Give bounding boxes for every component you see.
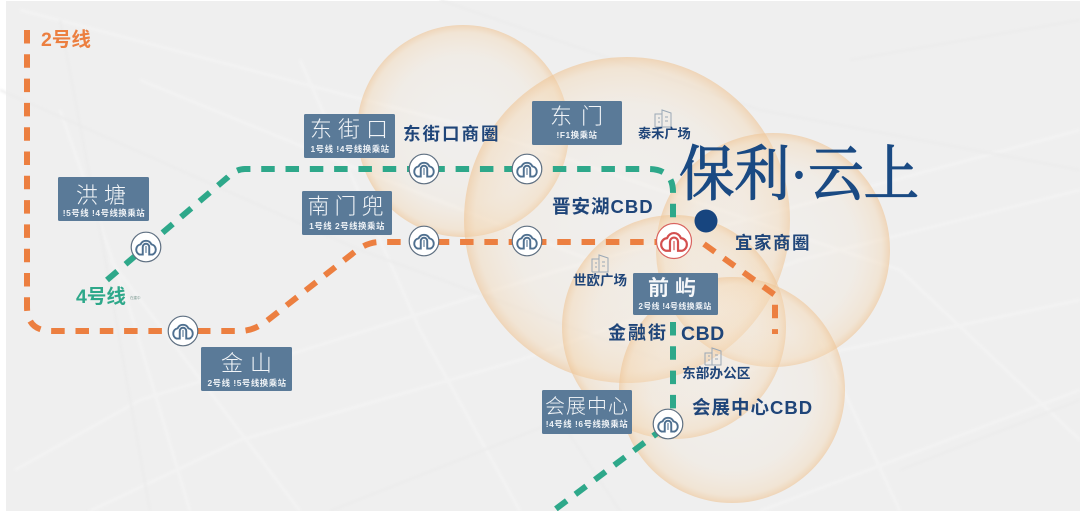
landmark: 东部办公区	[682, 348, 751, 381]
area label: CBD: CBD	[681, 323, 725, 345]
label box: 东门: !F1换乘站	[556, 130, 598, 140]
landmark: 泰禾广场: 泰禾广场	[638, 125, 691, 141]
landmark: 世欧广场	[573, 255, 627, 288]
catchment circles	[357, 25, 890, 503]
label box: 会展中心	[542, 390, 632, 434]
line label: 4号线: 在建中	[130, 295, 141, 300]
metro line 4 (green)	[107, 169, 673, 511]
station: 东门	[512, 154, 542, 184]
label box: 洪塘: !5号线 !4号线换乘站	[63, 208, 145, 218]
project marker	[694, 210, 718, 232]
label box: 前屿	[633, 273, 718, 315]
label box: 东门: 东门	[550, 104, 612, 129]
label box: 南门兜: 南门兜	[307, 194, 389, 219]
station: 会展中心	[653, 409, 683, 439]
label box: 金山: 2号线 !5号线换乘站	[207, 378, 287, 388]
area label: 晋安湖CBD: 晋安湖CBD	[552, 196, 654, 217]
label box: 南门兜: 1号线 2号线换乘站	[309, 221, 385, 231]
label box: 东门	[532, 101, 622, 145]
landmark: 泰禾广场	[638, 110, 691, 141]
line label: 4号线: 4号线	[76, 286, 126, 308]
label box: 东街口: 东街口	[310, 117, 394, 142]
station: 东街口	[409, 154, 439, 184]
line label: 2号线: 2号线	[41, 29, 91, 51]
label box: 洪塘: 洪塘	[76, 183, 132, 208]
label box: 东街口: 1号线 !4号线换乘站	[310, 144, 390, 154]
station: 前屿 (red)	[656, 224, 692, 258]
metro line 2 (orange)	[27, 30, 775, 334]
area label: 宜家商圈: 宜家商圈	[735, 233, 811, 253]
station: 晋安湖	[512, 226, 542, 256]
station: 金山	[168, 316, 198, 346]
label box: 洪塘	[58, 177, 149, 221]
project title: 保利·云上: 保利·云上	[679, 142, 919, 208]
area label: 东街口商圈: 东街口商圈	[403, 124, 500, 144]
station: 洪塘	[131, 232, 161, 262]
label box: 前屿: 前屿	[648, 277, 702, 300]
label box: 金山: 金山	[221, 351, 279, 376]
landmark: 东部办公区: 东部办公区	[682, 365, 751, 381]
station: 南门兜	[409, 226, 439, 256]
landmark: 世欧广场: 世欧广场	[573, 272, 627, 288]
label box: 南门兜	[302, 191, 392, 235]
label box: 金山	[201, 347, 292, 391]
label box: 会展中心: !4号线 !6号线换乘站	[546, 419, 628, 429]
label box: 前屿: 2号线 !4号线换乘站	[638, 301, 712, 311]
label box: 东街口	[304, 114, 395, 158]
area label: 金融街: 金融街	[608, 322, 668, 343]
area label: 会展中心CBD: 会展中心CBD	[692, 397, 813, 418]
label box: 会展中心: 会展中心	[545, 395, 629, 418]
